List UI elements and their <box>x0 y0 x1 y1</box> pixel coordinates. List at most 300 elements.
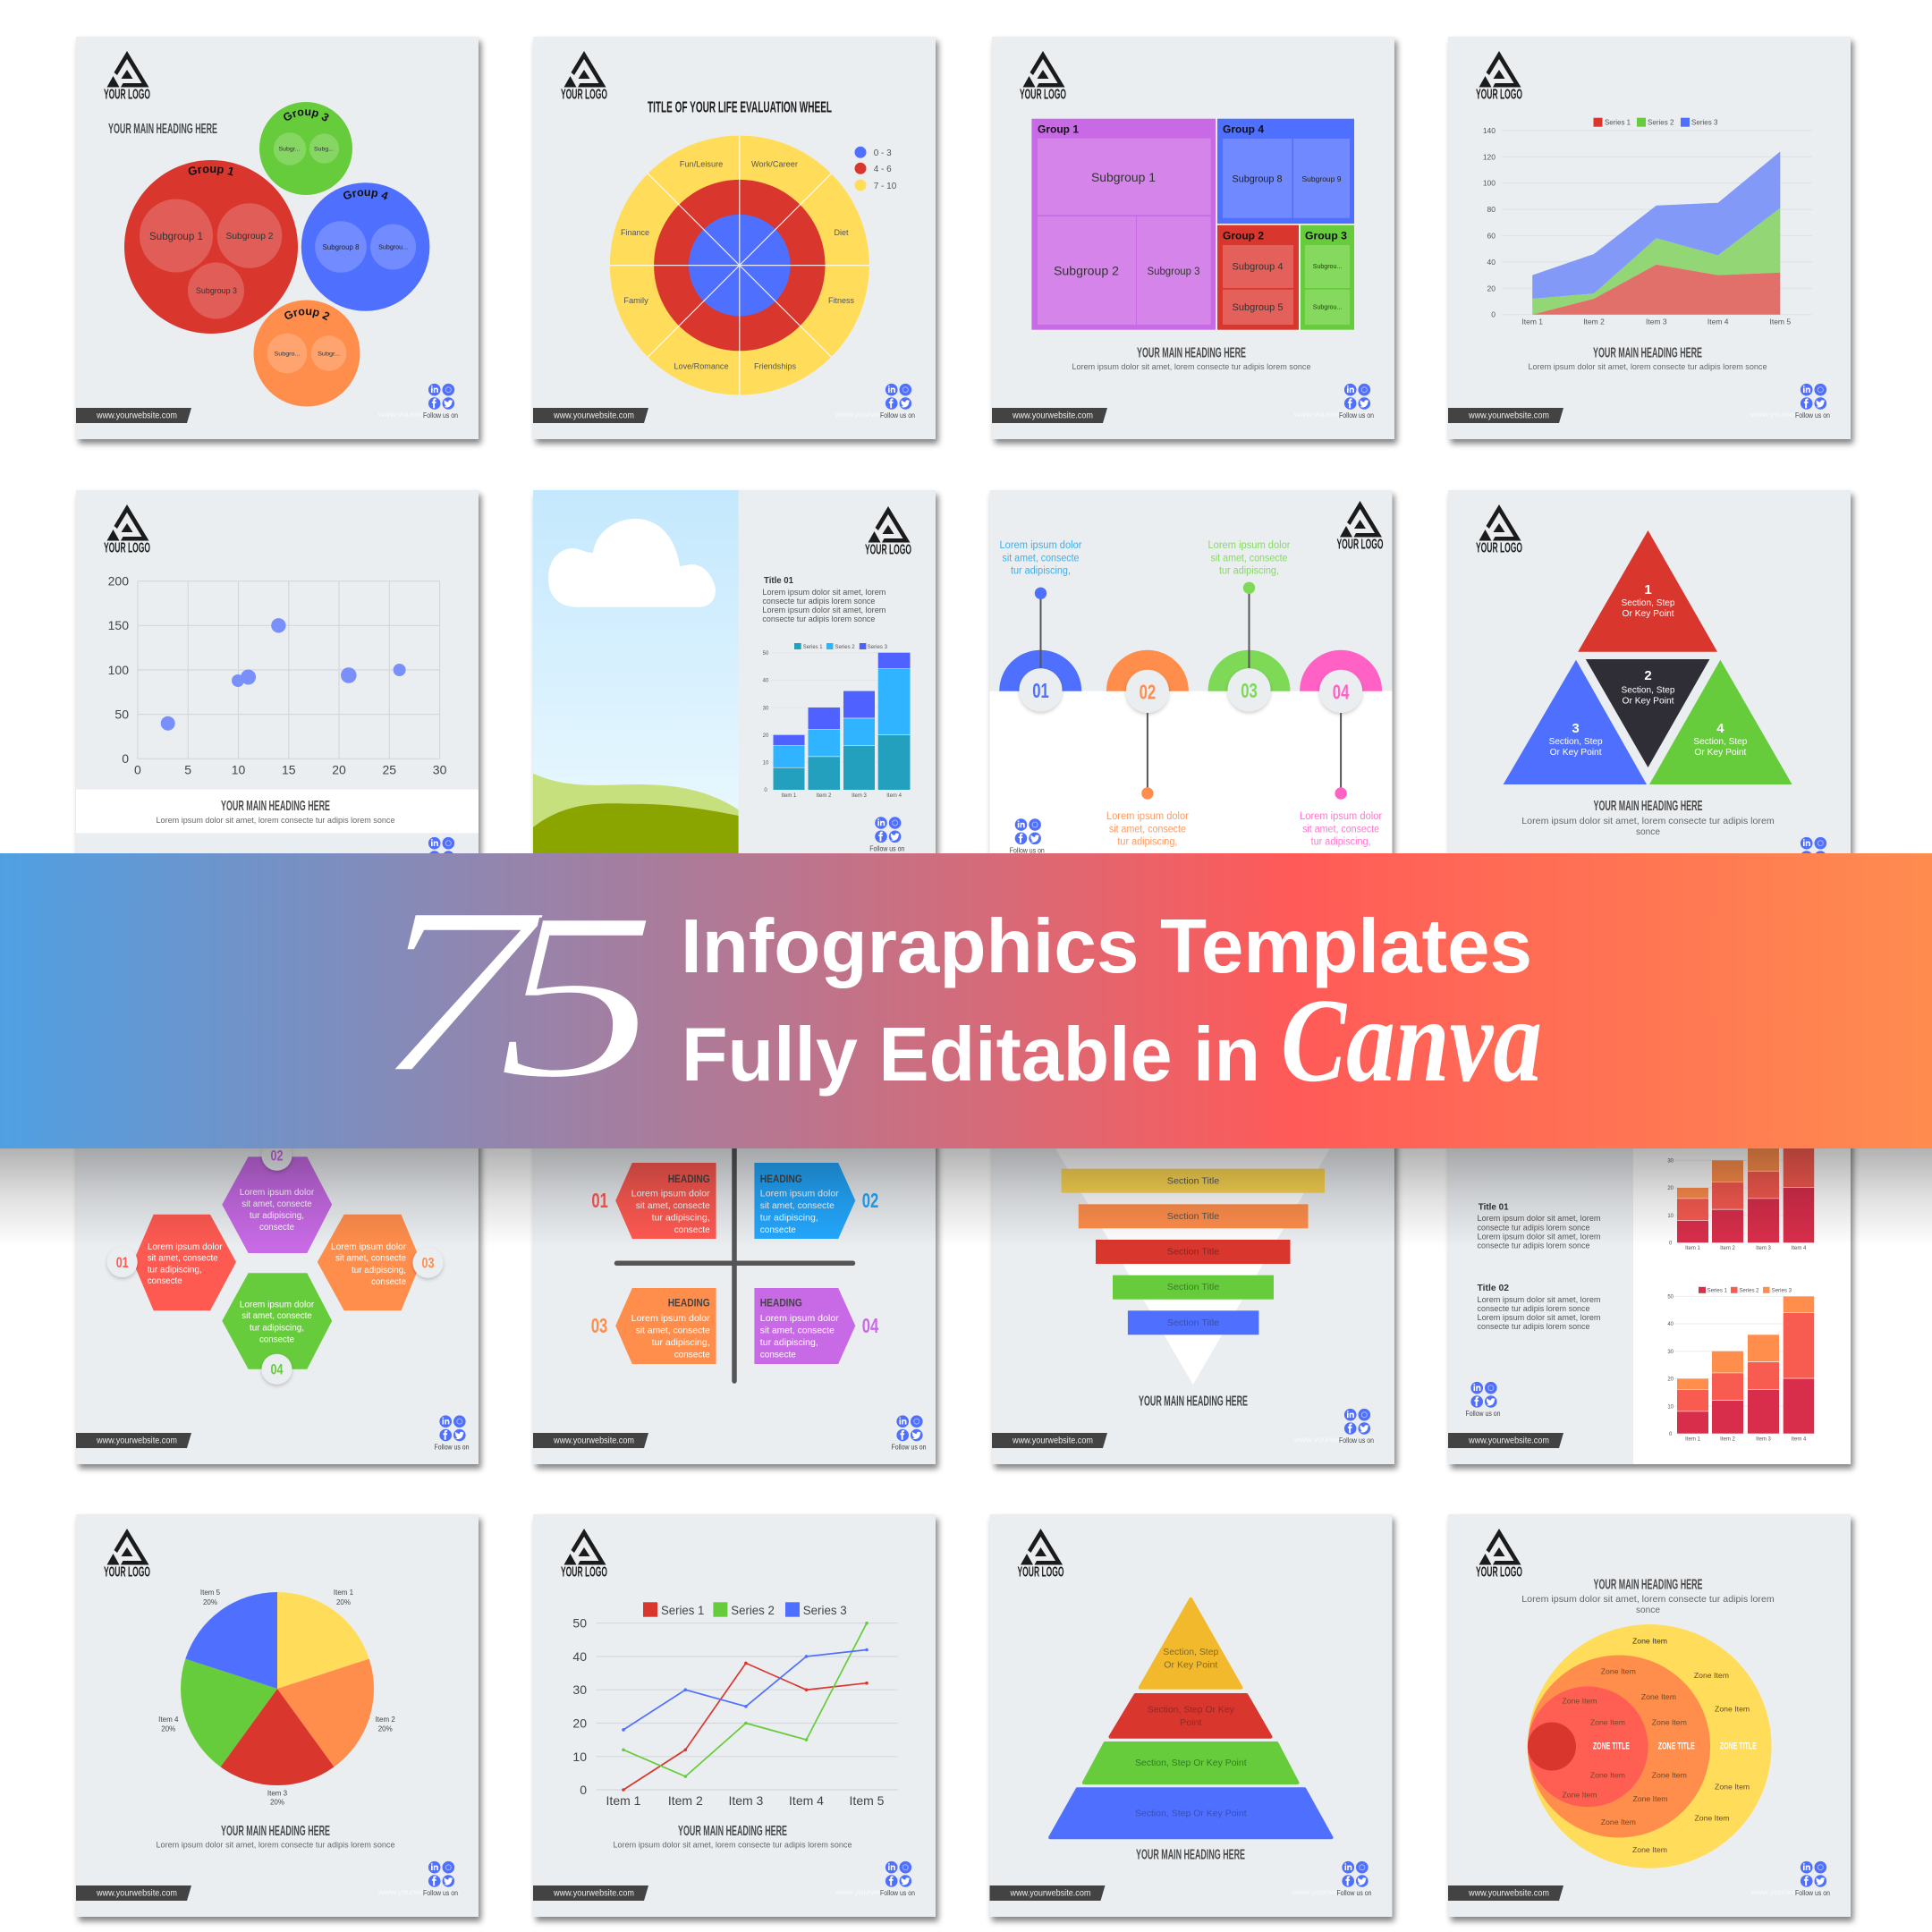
step 02: 02 <box>1140 680 1156 703</box>
scatter plot: 0 <box>122 751 129 766</box>
stacked bar chart: 20 <box>763 733 769 739</box>
panel: zone circles card <box>1448 1514 1851 1917</box>
pie chart: 20% <box>336 1598 351 1606</box>
triangle 1 <box>1578 530 1717 652</box>
text block: title 01: consecte tur adipis lorem sonce <box>762 597 875 606</box>
social icons: Follow us on <box>423 411 458 419</box>
nested zone diagram: ZONE TITLE <box>1658 1741 1695 1751</box>
hexagon 03: Lorem ipsum dolor <box>331 1241 406 1252</box>
area chart <box>1483 126 1812 326</box>
bubble: group 1: Group 1 <box>188 166 233 175</box>
pyramid tier 4: Section, Step Or Key Point <box>1135 1809 1247 1819</box>
pyramid tier 1: Or Key Point <box>1164 1660 1217 1671</box>
footer website: www.yourwebsite.com <box>1468 1436 1549 1445</box>
footer website: www.yourwebsite.com <box>96 1436 177 1445</box>
bubble: group 3 <box>259 102 352 195</box>
bubble: group 4: Group 4 <box>343 190 388 200</box>
line chart: Item 5 <box>850 1793 885 1808</box>
heading: YOUR MAIN HEADING HERE <box>108 122 217 137</box>
triangle 3: Or Key Point <box>1550 747 1602 758</box>
quadrant 01: sit amet, consecte <box>636 1200 710 1211</box>
triangle 1: Or Key Point <box>1623 608 1674 619</box>
line chart: 20 <box>572 1716 587 1730</box>
funnel bars: Section Title <box>1167 1282 1219 1292</box>
text block: title 01: consecte tur adipis lorem sonce <box>1478 1223 1590 1232</box>
line chart: Item 4 <box>789 1793 824 1808</box>
logo: YOUR LOGO <box>561 1565 607 1580</box>
footer website: www.yourwebsite.com <box>553 1889 634 1898</box>
banner <box>0 853 1932 1148</box>
nested zone diagram: Zone Item <box>1562 1696 1597 1705</box>
logo: YOUR LOGO <box>1476 1565 1522 1580</box>
social icons: Follow us on <box>435 1444 469 1451</box>
social icons <box>1750 386 1831 419</box>
social icons: www.yourwebsite.com <box>1750 411 1831 419</box>
stacked bar chart: Series 3 <box>868 645 888 650</box>
logo: YOUR LOGO <box>1020 88 1066 102</box>
panel: funnel card <box>992 1062 1394 1464</box>
social icons <box>1010 821 1045 854</box>
legend: 0 - 3 <box>874 148 892 158</box>
legend: Series 3 <box>803 1603 847 1617</box>
bubble: group 1 <box>124 160 298 334</box>
text block: title 01: Lorem ipsum dolor sit amet, lorem <box>1478 1232 1601 1241</box>
stacked bar chart: Series 2 <box>835 645 855 650</box>
logo: YOUR LOGO <box>104 88 150 102</box>
text block: title 01: Lorem ipsum dolor sit amet, lorem <box>762 588 886 597</box>
text block: title 01: Title 01 <box>764 575 793 586</box>
nested zone diagram: Zone Item <box>1652 1717 1687 1726</box>
hexagon 04: consecte <box>259 1335 294 1345</box>
step 02: Lorem ipsum dolor <box>1106 811 1189 822</box>
footer website <box>1448 1433 1563 1448</box>
social icons: www.yourwebsite.com <box>377 1888 459 1896</box>
footer website <box>533 1885 648 1901</box>
legend <box>855 147 897 191</box>
quadrant 03: tur adipiscing, <box>652 1337 710 1348</box>
funnel bars: Section Title <box>1167 1175 1219 1186</box>
quadrant 04: tur adipiscing, <box>760 1337 818 1348</box>
lower stacked bar chart: Item 3 <box>1756 1436 1771 1442</box>
line chart: Item 1 <box>606 1793 641 1808</box>
social icons <box>835 1863 916 1897</box>
hexagon 04: tur adipiscing, <box>250 1322 304 1333</box>
pyramid tier 3: Section, Step Or Key Point <box>1135 1758 1247 1768</box>
social icons <box>1465 1384 1501 1418</box>
quadrant 04: sit amet, consecte <box>760 1326 835 1336</box>
wheel chart <box>610 136 869 395</box>
triangle 1: Section, Step <box>1621 597 1675 608</box>
description <box>1521 1594 1775 1615</box>
funnel bars: Section Title <box>1167 1318 1219 1328</box>
footer website <box>992 408 1107 423</box>
triangle 3 <box>1504 660 1647 784</box>
social icons: Follow us on <box>1465 1410 1501 1418</box>
treemap: Group 1 <box>1038 125 1080 136</box>
pie chart: Item 5 <box>200 1589 221 1597</box>
stacked bar chart: 30 <box>763 706 769 711</box>
pyramid tier 2 <box>1111 1695 1270 1737</box>
headline line 2: Fully Editable in <box>682 1013 1260 1097</box>
legend <box>643 1602 847 1617</box>
banner drop shadow <box>0 1148 1932 1247</box>
footer website <box>992 1433 1107 1448</box>
wheel chart: Work/Career <box>751 159 798 168</box>
big number 75: 75 <box>372 857 658 1128</box>
panel: landscape and stacked bars card <box>533 490 936 893</box>
footer website: www.yourwebsite.com <box>96 1889 177 1898</box>
description: Lorem ipsum dolor sit amet, lorem consecte tur adipis lorem sonce <box>614 1841 852 1850</box>
pyramid tier 1: Section, Step <box>1163 1647 1218 1657</box>
nested zone diagram: Zone Item <box>1632 1845 1667 1854</box>
panel: scatter plot card <box>76 490 479 893</box>
triangle 3: 3 <box>1572 721 1580 736</box>
stacked bar chart: 10 <box>763 761 769 767</box>
footer website <box>989 1885 1106 1901</box>
nested zone diagram: Zone Item <box>1694 1814 1730 1823</box>
description: Lorem ipsum dolor sit amet, lorem consecte tur adipis lorem sonce <box>156 1841 395 1850</box>
logo: YOUR LOGO <box>104 540 150 556</box>
hexagon 03: 03 <box>422 1255 435 1272</box>
headline line 1: Infographics Templates <box>681 904 1532 989</box>
step 01: tur adipiscing, <box>1011 566 1071 577</box>
panel: timeline semicircles card <box>989 490 1392 893</box>
nested zone diagram: Zone Item <box>1715 1782 1750 1791</box>
quadrant 02: tur adipiscing, <box>760 1213 818 1224</box>
treemap: Subgroup 5 <box>1233 302 1283 313</box>
lower stacked bar chart: 10 <box>1667 1404 1674 1410</box>
bubble: group 4: Subgroup 8 <box>322 243 360 251</box>
social icons: Follow us on <box>1795 411 1830 419</box>
white chart panel <box>1633 1062 1851 1464</box>
logo <box>1476 504 1522 556</box>
hexagon 02 <box>222 1140 332 1253</box>
social icons: Follow us on <box>880 1889 915 1897</box>
footer website <box>533 1433 648 1448</box>
footer website <box>76 1433 191 1448</box>
heading: YOUR MAIN HEADING HERE <box>1594 799 1703 814</box>
lower stacked bar chart: Series 1 <box>1707 1288 1728 1293</box>
area chart: 140 <box>1483 126 1496 135</box>
social icons: www.yourwebsite.com <box>1750 1888 1831 1896</box>
heading: YOUR MAIN HEADING HERE <box>221 1824 330 1839</box>
footer website <box>76 408 191 423</box>
upper stacked bar chart: Item 4 <box>1792 1246 1807 1251</box>
scatter plot: 0 <box>134 762 141 776</box>
description: Lorem ipsum dolor sit amet, lorem consecte tur adipis lorem sonce <box>1528 362 1767 372</box>
step 02: tur adipiscing, <box>1117 837 1177 848</box>
hexagon 02: consecte <box>259 1222 294 1233</box>
treemap: Subgrou... <box>1313 304 1342 311</box>
quadrant 03: consecte <box>674 1349 710 1360</box>
lower stacked bar chart <box>1667 1287 1814 1442</box>
quadrant 02: consecte <box>760 1224 796 1235</box>
pie chart <box>158 1589 395 1807</box>
pyramid tier 2: Point <box>1180 1717 1202 1728</box>
heading: YOUR MAIN HEADING HERE <box>1593 345 1702 361</box>
text block: title 02: Lorem ipsum dolor sit amet, lorem <box>1478 1295 1601 1304</box>
text block: title 02 <box>1478 1283 1601 1331</box>
nested zone diagram: Zone Item <box>1562 1790 1597 1799</box>
triangle 3: Section, Step <box>1549 736 1603 747</box>
pyramid tier 4 <box>1050 1789 1331 1837</box>
area chart: 80 <box>1487 205 1496 214</box>
stacked bar chart: 40 <box>763 679 769 684</box>
step 04: tur adipiscing, <box>1311 837 1371 848</box>
description: Lorem ipsum dolor sit amet, lorem consecte tur adipis lorem sonce <box>1072 362 1311 372</box>
scatter plot: 15 <box>282 762 296 776</box>
quadrant 04 <box>754 1288 878 1364</box>
bubble: group 4: Subgrou... <box>378 245 408 250</box>
scatter plot: 5 <box>184 762 191 776</box>
quadrant 04: Lorem ipsum dolor <box>760 1313 839 1324</box>
lower stacked bar chart: 0 <box>1669 1432 1673 1437</box>
quadrant 01: Lorem ipsum dolor <box>631 1188 710 1199</box>
stacked bar chart: Item 4 <box>886 793 902 799</box>
area chart: 40 <box>1487 258 1496 267</box>
quadrant 01: HEADING <box>668 1174 710 1185</box>
quadrant 03: Lorem ipsum dolor <box>631 1313 710 1324</box>
white caption band: Lorem ipsum dolor sit amet, lorem consecte tur adipis lorem sonce <box>156 816 395 826</box>
area chart: 20 <box>1487 284 1496 292</box>
hexagon 01: Lorem ipsum dolor <box>148 1241 223 1252</box>
funnel bars <box>1062 1169 1325 1335</box>
panel: hexagon cycle card <box>76 1062 479 1464</box>
bubble: group 3: Group 3 <box>284 109 329 122</box>
hexagon 01: tur adipiscing, <box>148 1265 202 1275</box>
scatter plot: 10 <box>232 762 245 776</box>
footer website: www.yourwebsite.com <box>96 411 177 420</box>
area chart: Item 2 <box>1583 317 1605 326</box>
legend <box>1594 118 1718 127</box>
footer website <box>533 408 648 423</box>
scatter plot: 50 <box>114 707 129 721</box>
treemap: Group 4 <box>1223 125 1265 136</box>
upper stacked bar chart: Item 2 <box>1720 1246 1735 1251</box>
social icons: Follow us on <box>1339 1436 1374 1445</box>
hexagon 01: 01 <box>116 1254 129 1271</box>
wheel chart: Finance <box>621 228 649 237</box>
step 04: sit amet, consecte <box>1302 824 1379 835</box>
hexagon 02: 02 <box>270 1147 283 1165</box>
panel: treemap card <box>992 37 1394 439</box>
social icons <box>431 839 451 857</box>
area chart: Item 1 <box>1521 317 1543 326</box>
nested zone diagram <box>1528 1624 1771 1868</box>
step 03: Lorem ipsum dolor <box>1208 540 1291 551</box>
hexagon 04 <box>222 1273 332 1385</box>
treemap: Subgroup 9 <box>1302 174 1342 183</box>
step 01: 01 <box>1032 679 1049 702</box>
hexagon 01 <box>107 1215 236 1310</box>
quadrant 03: 03 <box>591 1314 607 1337</box>
nested zone diagram: Zone Item <box>1601 1818 1636 1826</box>
panel: two stacked bar charts card <box>1448 1062 1851 1464</box>
triangle 2 <box>1586 659 1709 767</box>
nested zone diagram: Zone Item <box>1590 1771 1625 1780</box>
line chart <box>572 1616 898 1808</box>
treemap: Subgrou... <box>1313 264 1342 270</box>
triangle 2: Or Key Point <box>1623 696 1674 707</box>
hexagon 02: Lorem ipsum dolor <box>240 1187 315 1198</box>
scatter plot <box>108 574 447 776</box>
heading: YOUR MAIN HEADING HERE <box>1139 1394 1248 1410</box>
hexagon 01: consecte <box>148 1275 182 1286</box>
lower stacked bar chart: Item 4 <box>1792 1436 1807 1442</box>
line chart: 50 <box>572 1616 587 1631</box>
line chart: 30 <box>572 1682 587 1697</box>
wheel chart: Family <box>623 296 648 305</box>
pie chart: Item 1 <box>334 1589 354 1597</box>
footer website <box>1448 408 1563 423</box>
quadrant 03: sit amet, consecte <box>636 1326 710 1336</box>
panel: quadrant arrows card <box>533 1062 936 1464</box>
hexagon 01: sit amet, consecte <box>148 1252 218 1263</box>
quadrant 02: Lorem ipsum dolor <box>760 1188 839 1199</box>
treemap <box>1031 119 1354 330</box>
social icons <box>1750 1863 1831 1897</box>
quadrant 02: HEADING <box>760 1174 802 1185</box>
step 04 <box>1300 650 1382 848</box>
title: TITLE OF YOUR LIFE EVALUATION WHEEL <box>648 98 832 116</box>
heading: YOUR MAIN HEADING HERE <box>678 1824 787 1839</box>
social icons <box>1293 386 1375 419</box>
white caption band <box>76 790 479 833</box>
logo <box>104 1529 150 1580</box>
text block: title 01 <box>1478 1202 1601 1250</box>
text block: title 01: Lorem ipsum dolor sit amet, lorem <box>762 606 886 614</box>
funnel backdrop <box>1051 1140 1335 1385</box>
panel: line chart card <box>533 1514 936 1917</box>
nested zone diagram: Zone Item <box>1694 1671 1729 1680</box>
quadrant 01: consecte <box>674 1224 710 1235</box>
panel: pyramid card <box>989 1514 1392 1917</box>
bubble: group 1: Subgroup 1 <box>149 230 203 242</box>
bubble: group 2: Group 2 <box>284 309 329 320</box>
line chart: 40 <box>572 1649 587 1664</box>
step 04: Lorem ipsum dolor <box>1300 811 1382 822</box>
nested zone diagram: Zone Item <box>1632 1637 1667 1646</box>
wheel chart: Friendships <box>754 361 796 370</box>
stacked bar chart: Series 1 <box>803 645 823 650</box>
legend: 7 - 10 <box>874 182 897 191</box>
social icons <box>377 386 459 419</box>
panel: life evaluation wheel card <box>533 37 936 439</box>
social icons: Follow us on <box>880 411 915 419</box>
nested zone diagram: Zone Item <box>1652 1771 1687 1780</box>
logo <box>104 51 150 102</box>
pie chart: 20% <box>203 1598 217 1606</box>
hexagon 03 <box>318 1215 444 1310</box>
footer website: www.yourwebsite.com <box>1012 1436 1093 1445</box>
bubble: group 1: Subgroup 3 <box>196 286 237 295</box>
step 01: Lorem ipsum dolor <box>1000 540 1082 551</box>
legend: Series 1 <box>661 1603 705 1617</box>
step 03: sit amet, consecte <box>1211 553 1288 564</box>
footer website: www.yourwebsite.com <box>1468 411 1549 420</box>
area chart: 0 <box>1491 310 1496 319</box>
treemap: Subgroup 3 <box>1147 267 1200 277</box>
triangle 2: Section, Step <box>1621 685 1675 696</box>
upper stacked bar chart: Item 1 <box>1685 1246 1700 1251</box>
text block: title 02: consecte tur adipis lorem sonce <box>1478 1322 1590 1331</box>
scatter plot: 30 <box>433 762 447 776</box>
triangle 1: 1 <box>1644 582 1652 597</box>
social icons <box>1291 1863 1373 1897</box>
social icons <box>1293 1411 1375 1445</box>
logo: YOUR LOGO <box>561 88 607 102</box>
footer website: www.yourwebsite.com <box>553 411 634 420</box>
step 04: 04 <box>1333 680 1350 703</box>
upper stacked bar chart: Item 3 <box>1756 1246 1771 1251</box>
pie chart: Item 2 <box>376 1716 395 1724</box>
pyramid tier 1 <box>1140 1599 1241 1688</box>
logo: YOUR LOGO <box>865 542 911 558</box>
text block: title 01: consecte tur adipis lorem sonce <box>1478 1241 1590 1250</box>
lower stacked bar chart: 50 <box>1667 1295 1674 1301</box>
triangle 4: Or Key Point <box>1694 747 1746 758</box>
lower stacked bar chart: Item 1 <box>1685 1436 1700 1442</box>
line chart: 10 <box>572 1750 587 1764</box>
panel: bubble chart card <box>76 37 479 439</box>
social icons: www.yourwebsite.com <box>1293 411 1375 419</box>
text block: title 02: Lorem ipsum dolor sit amet, lorem <box>1478 1313 1601 1322</box>
social icons: www.yourwebsite.com <box>835 411 916 419</box>
pyramid tier 3 <box>1084 1743 1297 1783</box>
description: Lorem ipsum dolor sit amet, lorem consecte tur adipis lorem <box>1521 816 1775 826</box>
illustration: sky, cloud and hills <box>533 490 739 893</box>
area chart: 120 <box>1483 152 1496 161</box>
wheel chart: Diet <box>834 228 849 237</box>
area chart: Item 4 <box>1707 317 1729 326</box>
nested zone diagram: Zone Item <box>1590 1717 1625 1726</box>
description: sonce <box>1636 1605 1660 1615</box>
footer website <box>76 1885 191 1901</box>
logo: YOUR LOGO <box>1476 88 1522 102</box>
pie chart: Item 4 <box>158 1716 179 1724</box>
pie chart: 20% <box>161 1725 175 1733</box>
legend: 4 - 6 <box>874 165 892 174</box>
description <box>1521 816 1775 837</box>
social icons: www.yourwebsite.com <box>1293 1436 1375 1444</box>
bubble: group 4 <box>301 182 429 311</box>
logo: YOUR LOGO <box>1476 540 1522 556</box>
legend: Series 2 <box>731 1603 775 1617</box>
hexagon 04: 04 <box>270 1361 284 1378</box>
social icons <box>377 1863 459 1897</box>
logo: YOUR LOGO <box>1336 537 1383 553</box>
step 01: sit amet, consecte <box>1002 553 1079 564</box>
line chart: 0 <box>580 1783 587 1797</box>
hexagon 04: sit amet, consecte <box>242 1310 312 1321</box>
stacked bar chart <box>763 643 911 799</box>
stacked bar chart: Item 3 <box>852 793 867 799</box>
quadrant 03 <box>591 1288 716 1364</box>
footer website: www.yourwebsite.com <box>1468 1889 1549 1898</box>
scatter plot: 100 <box>108 663 129 677</box>
upper stacked bar chart: 20 <box>1667 1186 1674 1191</box>
funnel bars: Section Title <box>1167 1247 1219 1258</box>
social icons <box>435 1418 469 1451</box>
text block: title 01: Lorem ipsum dolor sit amet, lorem <box>1478 1214 1601 1223</box>
social icons <box>835 386 916 419</box>
quadrant 01 <box>591 1163 716 1239</box>
bubble: group 3: Subg... <box>314 147 334 152</box>
step 03: 03 <box>1241 679 1258 702</box>
heading: YOUR MAIN HEADING HERE <box>1136 1848 1245 1862</box>
quadrant 01: tur adipiscing, <box>652 1213 710 1224</box>
white lower area <box>989 691 1392 893</box>
